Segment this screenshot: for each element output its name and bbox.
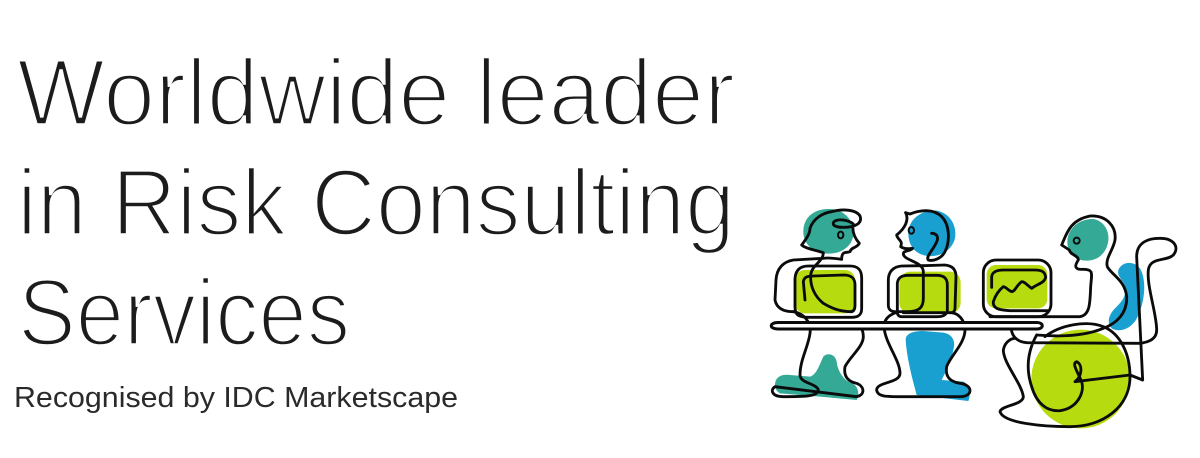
subtitle: Recognised by IDC Marketscape [14,382,458,414]
figure: right person with monitor and ball [983,216,1176,428]
title: Worldwide leader [17,40,735,146]
title: Services [18,260,350,366]
title: in Risk Consulting [17,150,735,256]
figure: middle person [877,211,970,401]
table [771,322,1042,329]
title [17,40,735,366]
figure: left person [772,209,863,400]
illustration: people at a table [771,209,1176,428]
